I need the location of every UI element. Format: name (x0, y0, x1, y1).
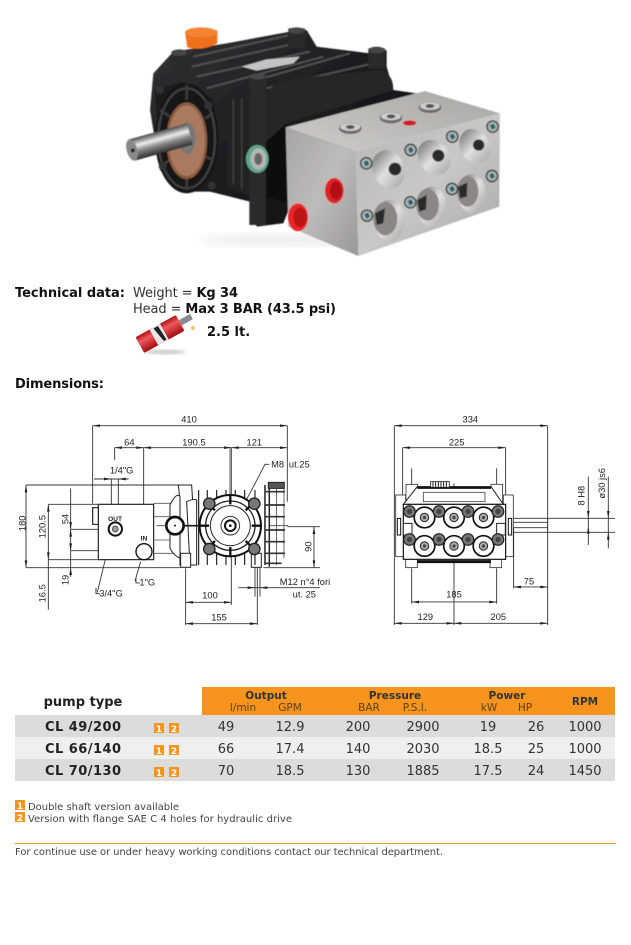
dimension labels: 334 (463, 414, 478, 424)
table rows: 1000 (568, 720, 602, 735)
table rows: CL 70/130 (45, 764, 121, 779)
table header: BAR (358, 702, 380, 714)
table rows (15, 715, 615, 781)
technical data: Technical data: (15, 286, 125, 301)
dimension labels: 120.5 (37, 515, 47, 538)
shaft (124, 123, 193, 162)
dimension labels: 54 (61, 514, 71, 524)
table rows: 200 (346, 720, 370, 735)
table rows: 18.5 (276, 764, 304, 779)
dimension labels: 185 (446, 590, 462, 600)
table rows: 2900 (406, 720, 440, 735)
dimension labels: 121 (247, 438, 262, 448)
table rows: 2 (171, 725, 177, 735)
dimension labels: M12 n°4 fori (280, 577, 330, 587)
top outlets (372, 150, 405, 188)
technical data: Head = Max 3 BAR (43.5 psi) (133, 302, 336, 317)
table rows: 130 (346, 764, 370, 779)
technical data (15, 286, 336, 392)
dimension labels: M8 (271, 460, 284, 470)
table rows: 1 (156, 747, 162, 757)
table rows: 19 (480, 720, 496, 735)
table rows: 2 (171, 769, 177, 779)
dimension labels: 225 (449, 438, 464, 448)
dimension labels: 180 (17, 516, 27, 531)
pump housing (170, 482, 285, 567)
table rows: 1000 (568, 742, 602, 757)
table header: GPM (278, 702, 302, 714)
dimension labels: 410 (181, 414, 197, 424)
table rows: 70 (218, 764, 234, 779)
side view drawing (17, 414, 330, 625)
cap: orange (185, 28, 217, 49)
table rows: 18.5 (474, 742, 502, 757)
performance table (15, 687, 615, 781)
table header: kW (481, 702, 498, 714)
dimension labels: ut.25 (289, 460, 310, 470)
dimension labels: ut. 25 (293, 590, 316, 600)
table rows: 12.9 (276, 720, 304, 735)
side view drawing: IN (141, 536, 148, 543)
green fitting (246, 145, 269, 173)
side view drawing: OUT (108, 516, 122, 523)
legend notes (15, 800, 292, 825)
table rows: 1 (156, 725, 162, 735)
dimension labels: 155 (211, 612, 227, 622)
table header: Output (245, 690, 287, 702)
table header: RPM (572, 696, 598, 708)
technical data: Weight = Kg 34 (133, 286, 238, 301)
table rows: 49 (218, 720, 234, 735)
table rows: 140 (346, 742, 370, 757)
dimension labels: 1/4"G (110, 466, 133, 476)
dimension labels: 16.5 (37, 584, 47, 602)
table header (44, 687, 615, 715)
table rows: 24 (528, 764, 544, 779)
table header: P.S.I. (403, 702, 427, 714)
pump body (150, 30, 417, 227)
table header: Pressure (369, 690, 421, 702)
heading: dimensions: Dimensions: (15, 377, 104, 392)
table rows: 1450 (568, 764, 602, 779)
dimension labels (418, 414, 607, 622)
table rows: CL 49/200 (45, 720, 121, 735)
legend notes: 1 (17, 802, 23, 812)
dimension labels: 190.5 (182, 438, 206, 448)
dimension labels: 3/4"G (99, 588, 123, 598)
dimension labels: ø30 js6 (597, 468, 607, 499)
red caps (325, 178, 344, 203)
legend notes: Version with flange SAE C 4 holes for hydraulic drive (28, 814, 292, 825)
table header: HP (518, 702, 532, 714)
top plugs (339, 123, 362, 134)
technical data: 2.5 lt. (207, 325, 250, 340)
head block (93, 504, 154, 560)
icon: red tank (136, 309, 196, 354)
screws (360, 157, 373, 170)
dimension labels: 205 (491, 612, 506, 622)
table rows: 1 (156, 769, 162, 779)
legend notes: Double shaft version available (28, 802, 179, 813)
table header: Power (489, 690, 526, 702)
table rows: CL 66/140 (45, 742, 121, 757)
dimension labels: 90 (303, 541, 313, 552)
dimension labels (17, 414, 330, 622)
pump photograph (124, 27, 500, 256)
head block (286, 91, 500, 152)
table header: pump type (44, 695, 123, 710)
footer note: For continue use or under heavy working conditions contact our technical department. (15, 847, 443, 858)
table rows: 17.5 (474, 764, 502, 779)
dimension labels: 1"G (139, 578, 155, 588)
table rows: 17.4 (276, 742, 304, 757)
bottom ports (374, 200, 405, 241)
dimension labels: 64 (124, 438, 135, 448)
table rows: 66 (218, 742, 234, 757)
table rows: 2 (171, 747, 177, 757)
flange (155, 82, 222, 192)
front view drawing (394, 414, 615, 625)
table header: l/min (230, 702, 256, 714)
dimension labels: 8 H8 (576, 486, 586, 506)
table rows: 26 (528, 720, 544, 735)
bolts (172, 28, 385, 225)
legend notes: 2 (17, 814, 23, 824)
dimension labels: 129 (418, 612, 433, 622)
dimension labels: 19 (61, 575, 71, 585)
dimension labels: 100 (202, 591, 218, 601)
table rows: 2030 (406, 742, 440, 757)
table rows: 1885 (406, 764, 440, 779)
table rows: 25 (528, 742, 544, 757)
dimension labels: 75 (524, 576, 534, 586)
